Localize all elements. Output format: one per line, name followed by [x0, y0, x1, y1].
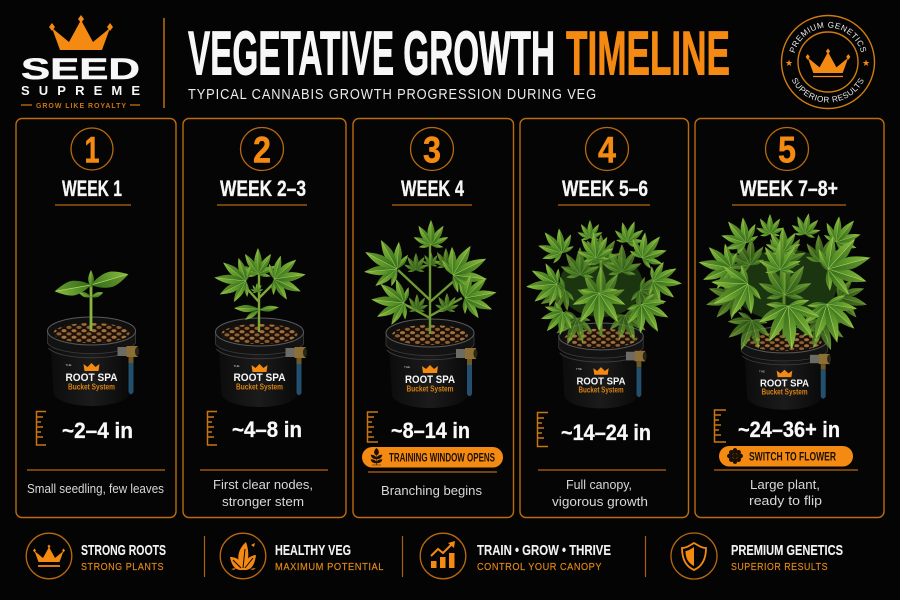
subtitle: TYPICAL CANNABIS GROWTH PROGRESSION DURING VEG [188, 87, 597, 103]
footer item: strong roots: STRONG ROOTS [81, 542, 166, 559]
panel: week 1 [16, 118, 176, 518]
description: First clear nodes, [213, 477, 313, 492]
description: Branching begins [381, 483, 482, 498]
bucket: root spa: ROOT SPA [66, 372, 118, 384]
footer item: strong roots: STRONG PLANTS [81, 562, 164, 573]
height: ~14–24 in [561, 420, 651, 445]
footer item: train grow thrive: TRAIN • GROW • THRIVE [477, 542, 611, 559]
callout pill: switch to flower: SWITCH TO FLOWER [749, 450, 836, 464]
step number 1: 1 [84, 130, 100, 170]
step number 2 [240, 128, 284, 170]
footer item: healthy veg: HEALTHY VEG [275, 542, 351, 559]
bucket: root spa: THE [759, 370, 765, 373]
plant: full canopy [524, 216, 684, 351]
callout pill: training window [362, 447, 503, 468]
heading: week 2-3: WEEK 2–3 [220, 176, 306, 201]
badge: premium genetics: ★ [862, 58, 870, 68]
heading: week 4: WEEK 4 [401, 176, 464, 201]
bucket: root spa: Bucket System [761, 388, 808, 396]
description: Small seedling, few leaves [27, 481, 164, 496]
logo: Seed Supreme [21, 15, 140, 110]
description: ready to flip [749, 493, 822, 508]
description: Full canopy, [566, 477, 632, 492]
footer strip [26, 533, 843, 579]
badge: premium genetics: SUPERIOR RESULTS [792, 78, 864, 103]
panel: week 7-8+ [694, 118, 884, 518]
description: stronger stem [222, 494, 304, 509]
step number 5 [766, 128, 808, 170]
panel: week 5-6 [520, 118, 688, 518]
icon: leaves [230, 542, 256, 570]
logo wordmark: SEED [21, 53, 140, 86]
plant: branching [353, 220, 501, 334]
footer item: train grow thrive [420, 533, 611, 579]
bucket: root spa [559, 323, 647, 408]
description: Large plant, [750, 477, 820, 492]
step number 2: 2 [253, 130, 271, 170]
description [552, 477, 648, 509]
description: vigorous growth [552, 494, 648, 509]
ruler icon [208, 412, 217, 445]
height: ~8–14 in [391, 418, 470, 443]
panel: week 2-3 [183, 118, 346, 518]
footer item: premium genetics: SUPERIOR RESULTS [731, 562, 828, 573]
description [213, 477, 313, 509]
plant: large plant [694, 207, 879, 358]
bucket: root spa: Bucket System [578, 386, 624, 395]
callout pill: training window: TRAINING WINDOW OPENS [389, 450, 495, 464]
bucket: root spa: ROOT SPA [234, 372, 286, 384]
logo subword: SUPREME [21, 83, 140, 98]
plant: seedling [53, 267, 131, 331]
bucket: root spa: THE [576, 367, 582, 371]
step number 3: 3 [423, 130, 441, 170]
bucket: root spa: THE [404, 365, 410, 369]
plant: young plant [212, 248, 309, 332]
description [749, 477, 822, 508]
badge: premium genetics: ★ [785, 58, 793, 68]
height: ~24–36+ in [738, 417, 840, 442]
ruler icon [36, 412, 46, 445]
bucket: root spa [216, 318, 307, 407]
footer item: premium genetics [671, 533, 843, 579]
icon: logo crown [49, 15, 113, 50]
badge: premium genetics [780, 14, 876, 110]
badge: premium genetics: PREMIUM GENETICS [789, 22, 866, 53]
heading: week 7-8+: WEEK 7–8+ [740, 176, 838, 201]
step number 3 [410, 128, 454, 170]
ruler icon [368, 412, 378, 442]
bucket: root spa: ROOT SPA [577, 375, 626, 387]
footer item: healthy veg: MAXIMUM POTENTIAL [275, 562, 384, 573]
icon: sprout [371, 448, 382, 465]
step number 1 [71, 128, 113, 170]
bucket: root spa [48, 317, 139, 406]
bucket: root spa: Bucket System [236, 382, 283, 392]
icon: crown [33, 544, 65, 566]
footer item: strong roots [26, 533, 166, 579]
title accent: TIMELINE [566, 18, 730, 88]
icon: flower [727, 448, 743, 464]
bucket: root spa [386, 319, 478, 408]
callout pill: switch to flower [719, 446, 853, 466]
bucket: root spa [741, 327, 831, 410]
heading: week 5-6: WEEK 5–6 [562, 176, 648, 201]
bucket: root spa: THE [234, 364, 240, 368]
footer item: train grow thrive: CONTROL YOUR CANOPY [477, 562, 602, 573]
ruler icon [538, 412, 548, 446]
footer item: healthy veg [220, 533, 384, 579]
step number 4: 4 [598, 130, 616, 170]
step number 4 [586, 128, 628, 170]
panel: week 4 [353, 118, 514, 518]
bucket: root spa: THE [66, 363, 72, 367]
heading: week 1: WEEK 1 [62, 176, 122, 201]
bucket: root spa: Bucket System [68, 382, 115, 392]
height: ~4–8 in [232, 417, 302, 442]
bucket: root spa: ROOT SPA [760, 378, 809, 389]
bucket: root spa: ROOT SPA [405, 374, 455, 386]
footer item: premium genetics: PREMIUM GENETICS [731, 542, 843, 559]
bucket: root spa: Bucket System [406, 384, 454, 394]
icon: growth chart [431, 541, 455, 568]
icon: shield [682, 543, 706, 570]
height: ~2–4 in [62, 418, 133, 443]
title: VEGETATIVE GROWTH [188, 18, 555, 88]
logo tagline: GROW LIKE ROYALTY [36, 103, 126, 110]
ruler icon [714, 410, 726, 442]
step number 5: 5 [778, 130, 796, 170]
